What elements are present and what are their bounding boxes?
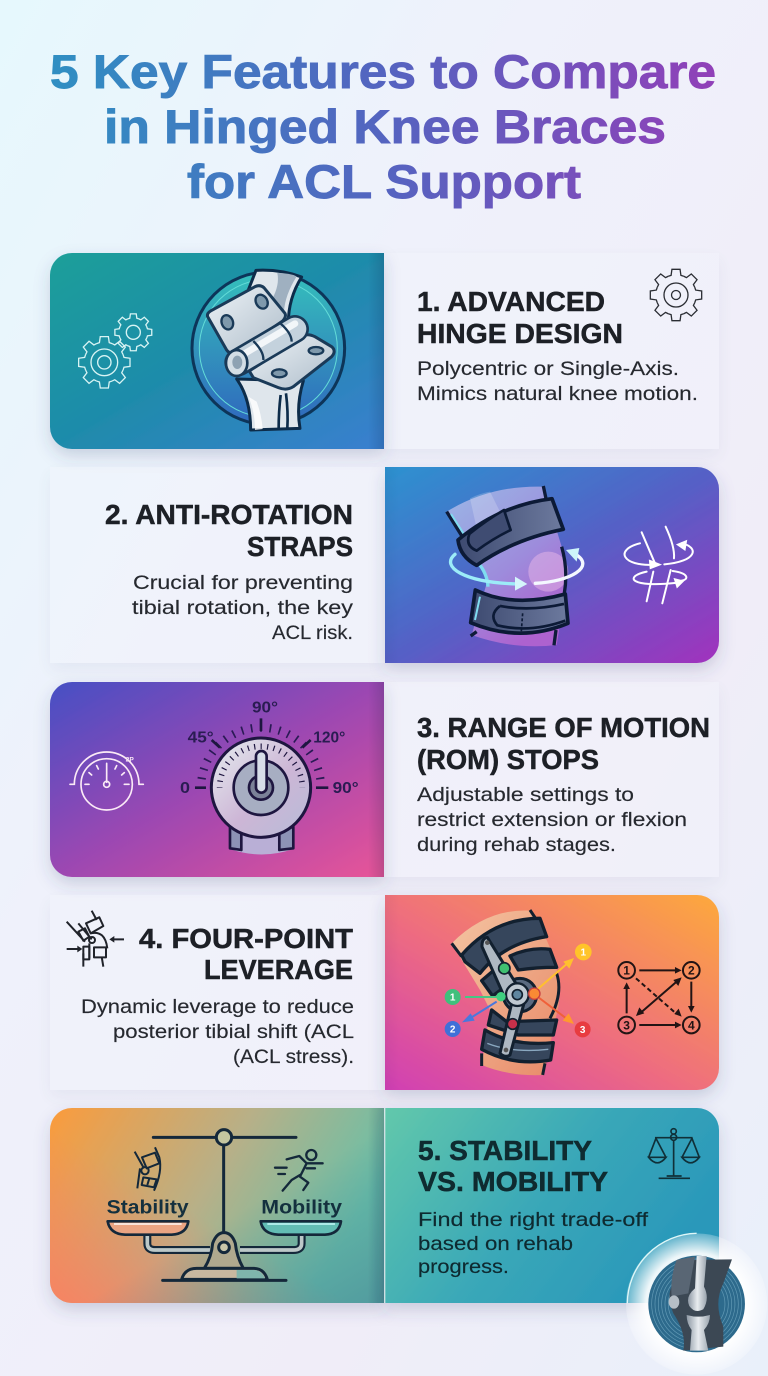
- title: for ACL Support: [187, 155, 581, 208]
- text block: Mimics natural knee motion.: [417, 383, 698, 405]
- panel: 5 stability vs mobility: [50, 1108, 719, 1303]
- illustration: hinged brace with force arrows: [445, 910, 592, 1075]
- heading: 2. ANTI-ROTATION: [105, 499, 353, 530]
- text block: restrict extension or flexion: [417, 809, 687, 831]
- icon: stability brace: [135, 1147, 160, 1191]
- text block: (ACL stress).: [233, 1046, 354, 1068]
- icon: gauge: 2P: [126, 757, 134, 764]
- icon: four point diagram: 4: [688, 1018, 695, 1032]
- icon: rotation lines: [625, 527, 693, 603]
- card image: hinge: [50, 253, 384, 449]
- card image: leverage: [385, 895, 719, 1090]
- text block: tibial rotation, the key: [132, 597, 353, 619]
- text block: Adjustable settings to: [417, 784, 634, 806]
- icon: gear: [650, 269, 702, 321]
- card image: dial: [50, 682, 384, 877]
- panel: 4 four-point leverage: [50, 895, 719, 1090]
- text block: during rehab stages.: [417, 834, 616, 856]
- text block: [418, 1209, 649, 1278]
- card text panel: [384, 1108, 719, 1303]
- illustration: hinged brace with force arrows: 2: [450, 1025, 456, 1036]
- card image: straps: [385, 467, 719, 663]
- title: 5 Key Features to Compare: [50, 45, 716, 98]
- heading: STRAPS: [247, 531, 353, 562]
- heading: HINGE DESIGN: [417, 318, 623, 349]
- heading: [418, 1135, 608, 1197]
- illustration: hinged brace with force arrows: 3: [580, 1025, 586, 1036]
- heading: 5. STABILITY: [418, 1135, 592, 1166]
- text block: progress.: [418, 1256, 509, 1278]
- illustration: ROM dial: 90°: [252, 699, 278, 716]
- illustration: knee with straps: [447, 486, 583, 646]
- icon: four point diagram: 3: [623, 1018, 630, 1032]
- heading: VS. MOBILITY: [418, 1166, 608, 1197]
- text block: Find the right trade-off: [418, 1209, 649, 1231]
- heading: (ROM) STOPS: [417, 744, 599, 775]
- card image: balance scale: [50, 1108, 384, 1303]
- text block: ACL risk.: [272, 622, 353, 644]
- illustration: ROM dial: 0: [180, 780, 190, 797]
- heading: [105, 499, 353, 562]
- heading: [417, 712, 710, 775]
- heading: 4. FOUR-POINT: [139, 923, 353, 954]
- heading: 1. ADVANCED: [417, 286, 605, 317]
- text block: Polycentric or Single-Axis.: [417, 358, 679, 380]
- knee anatomy medallion: [626, 1233, 767, 1375]
- text block: [132, 572, 353, 644]
- illustration: hinged brace with force arrows: 1: [450, 993, 456, 1004]
- icon: gauge: [70, 752, 143, 810]
- icon: four point diagram: 1: [623, 964, 630, 978]
- text block: posterior tibial shift (ACL: [113, 1021, 354, 1043]
- panel: 1 advanced hinge design: [50, 253, 719, 449]
- icon: double gears: [79, 314, 152, 388]
- illustration: scale: Stability: [107, 1197, 189, 1218]
- icon: running person: [275, 1150, 323, 1191]
- text block: Crucial for preventing: [133, 572, 353, 594]
- illustration: ROM dial: 45°: [188, 730, 214, 747]
- text block: [81, 996, 354, 1068]
- icon: justice scale: [649, 1129, 699, 1178]
- illustration: ROM dial: 120°: [313, 730, 345, 747]
- illustration: scale: Mobility: [261, 1197, 342, 1218]
- icon: four point diagram: 2: [688, 964, 695, 978]
- heading: [139, 923, 353, 985]
- title: [50, 45, 716, 208]
- heading: 3. RANGE OF MOTION: [417, 712, 710, 743]
- text block: based on rehab: [418, 1233, 573, 1255]
- illustration: ROM dial: [180, 699, 359, 854]
- illustration: hinged brace with force arrows: 1: [581, 948, 587, 959]
- icon: four point diagram: [618, 962, 700, 1033]
- illustration: metal hinge: [192, 270, 345, 430]
- icon: brace with arrows: [67, 911, 124, 967]
- heading: [417, 286, 623, 349]
- illustration: ROM dial: 90°: [333, 780, 359, 797]
- panel: 3 range of motion stops: [50, 682, 719, 877]
- text block: Dynamic leverage to reduce: [81, 996, 354, 1018]
- title: in Hinged Knee Braces: [104, 100, 666, 153]
- text block: [417, 358, 698, 405]
- illustration: scale: [107, 1130, 342, 1280]
- panel: 2 anti-rotation straps: [50, 467, 719, 663]
- heading: LEVERAGE: [204, 954, 353, 985]
- text block: [417, 784, 687, 856]
